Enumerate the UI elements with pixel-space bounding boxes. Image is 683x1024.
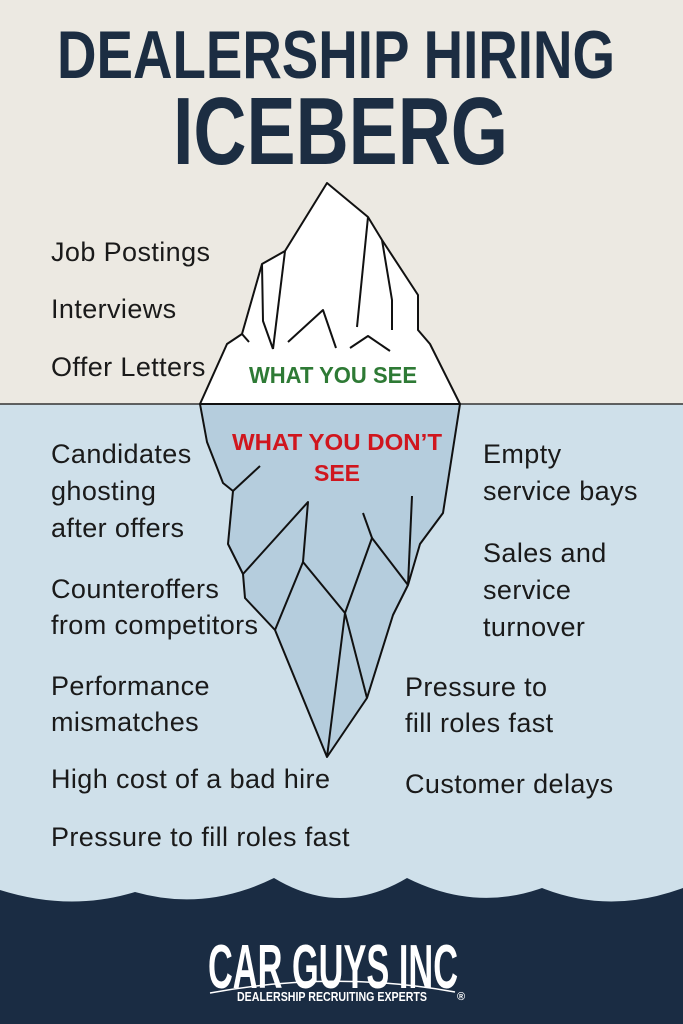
title [57,17,615,185]
text: hidden right items: Pressure to [405,672,547,702]
label: what you don't see: WHAT YOU DON’T [232,429,442,455]
text: hidden right items [405,439,638,799]
text: hidden left items: Performance [51,671,210,701]
text: hidden right items: Sales and [483,538,607,568]
text: visible items [51,237,210,382]
logo: ® [457,991,465,1003]
text: hidden left items: Pressure to fill roles fast [51,822,350,852]
logo: DEALERSHIP RECRUITING EXPERTS [237,989,427,1004]
text: hidden left items: from competitors [51,610,258,640]
text: hidden left items: after offers [51,513,184,543]
text: hidden left items: High cost of a bad hire [51,764,330,794]
logo: CAR GUYS INC [208,933,458,1002]
text: hidden right items: service bays [483,476,638,506]
text: hidden right items: Customer delays [405,769,614,799]
text: hidden left items: mismatches [51,707,199,737]
text: visible items: Interviews [51,294,177,324]
text: hidden right items: turnover [483,612,585,642]
text: hidden left items [51,439,350,852]
label: what you don't see: SEE [314,460,360,486]
text: hidden left items: Counteroffers [51,574,219,604]
iceberg [200,183,460,757]
title: ICEBERG [173,78,508,185]
text: hidden left items: Candidates [51,439,192,469]
text: hidden right items: Empty [483,439,562,469]
text: hidden right items: service [483,575,571,605]
text: visible items: Job Postings [51,237,210,267]
text: hidden left items: ghosting [51,476,156,506]
label: what you see: WHAT YOU SEE [249,362,417,388]
logo [208,933,465,1004]
label: what you don't see [232,429,442,486]
text: hidden right items: fill roles fast [405,708,554,738]
text: visible items: Offer Letters [51,352,206,382]
footer waves [0,878,683,1024]
